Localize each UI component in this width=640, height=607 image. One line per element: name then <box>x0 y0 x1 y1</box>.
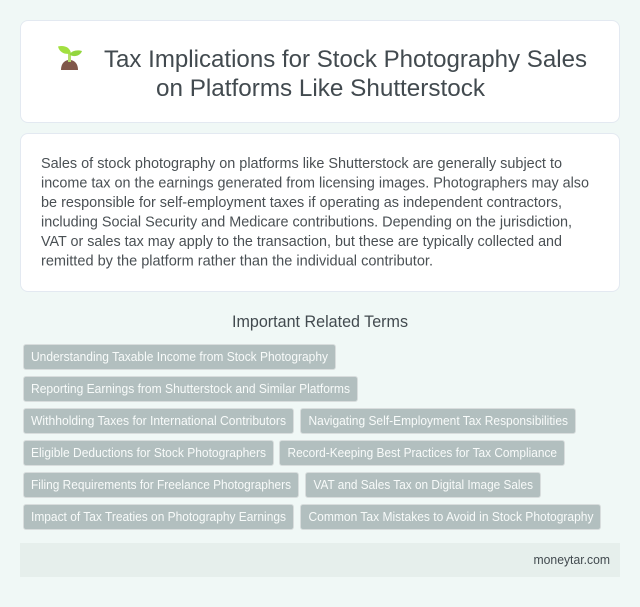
icon: seedling <box>58 46 82 70</box>
tag: Understanding Taxable Income from Stock Photography <box>31 350 329 364</box>
tag <box>24 376 358 402</box>
tag <box>306 472 540 498</box>
text block: description: VAT or sales tax may apply to the transaction, but these are typically collected and <box>41 234 562 250</box>
text block: description: income tax on the earnings generated from licensing images. Photographers may also <box>41 176 589 192</box>
tag <box>300 408 576 434</box>
tag <box>24 344 336 370</box>
title: on Platforms Like Shutterstock <box>156 75 486 102</box>
tag: Withholding Taxes for International Contributors <box>31 414 286 428</box>
tag: Eligible Deductions for Stock Photographers <box>31 446 266 460</box>
tag <box>280 440 564 466</box>
tag <box>24 440 274 466</box>
tag: Navigating Self-Employment Tax Responsibilities <box>308 414 568 428</box>
title <box>104 46 587 102</box>
text block: description: including Social Security and Medicare contributions. Depending on the jurisdiction, <box>41 214 572 230</box>
footer: moneytar.com <box>534 553 610 567</box>
text block: description: remitted by the platform rather than the individual contributor. <box>41 254 433 270</box>
tag <box>24 504 294 530</box>
title: Tax Implications for Stock Photography Sales <box>104 46 587 73</box>
tag: Filing Requirements for Freelance Photographers <box>31 478 291 492</box>
text block: description <box>41 156 589 270</box>
panel: description card <box>20 134 620 292</box>
tag: Record-Keeping Best Practices for Tax Compliance <box>288 446 557 460</box>
tag: Impact of Tax Treaties on Photography Earnings <box>31 510 286 524</box>
text block: description: be responsible for self-employment taxes if operating as independent contractors, <box>41 195 562 211</box>
tag <box>24 408 294 434</box>
heading: important related terms: Important Related Terms <box>232 313 408 331</box>
tag: Common Tax Mistakes to Avoid in Stock Photography <box>308 510 594 524</box>
tag: Reporting Earnings from Shutterstock and Similar Platforms <box>31 382 350 396</box>
tag <box>24 472 298 498</box>
tag: VAT and Sales Tax on Digital Image Sales <box>314 478 533 492</box>
text block: description: Sales of stock photography on platforms like Shutterstock are generally subject to <box>41 156 562 172</box>
tag list <box>24 344 600 530</box>
tag <box>300 504 600 530</box>
footer <box>20 543 620 577</box>
panel: title card <box>20 20 620 122</box>
